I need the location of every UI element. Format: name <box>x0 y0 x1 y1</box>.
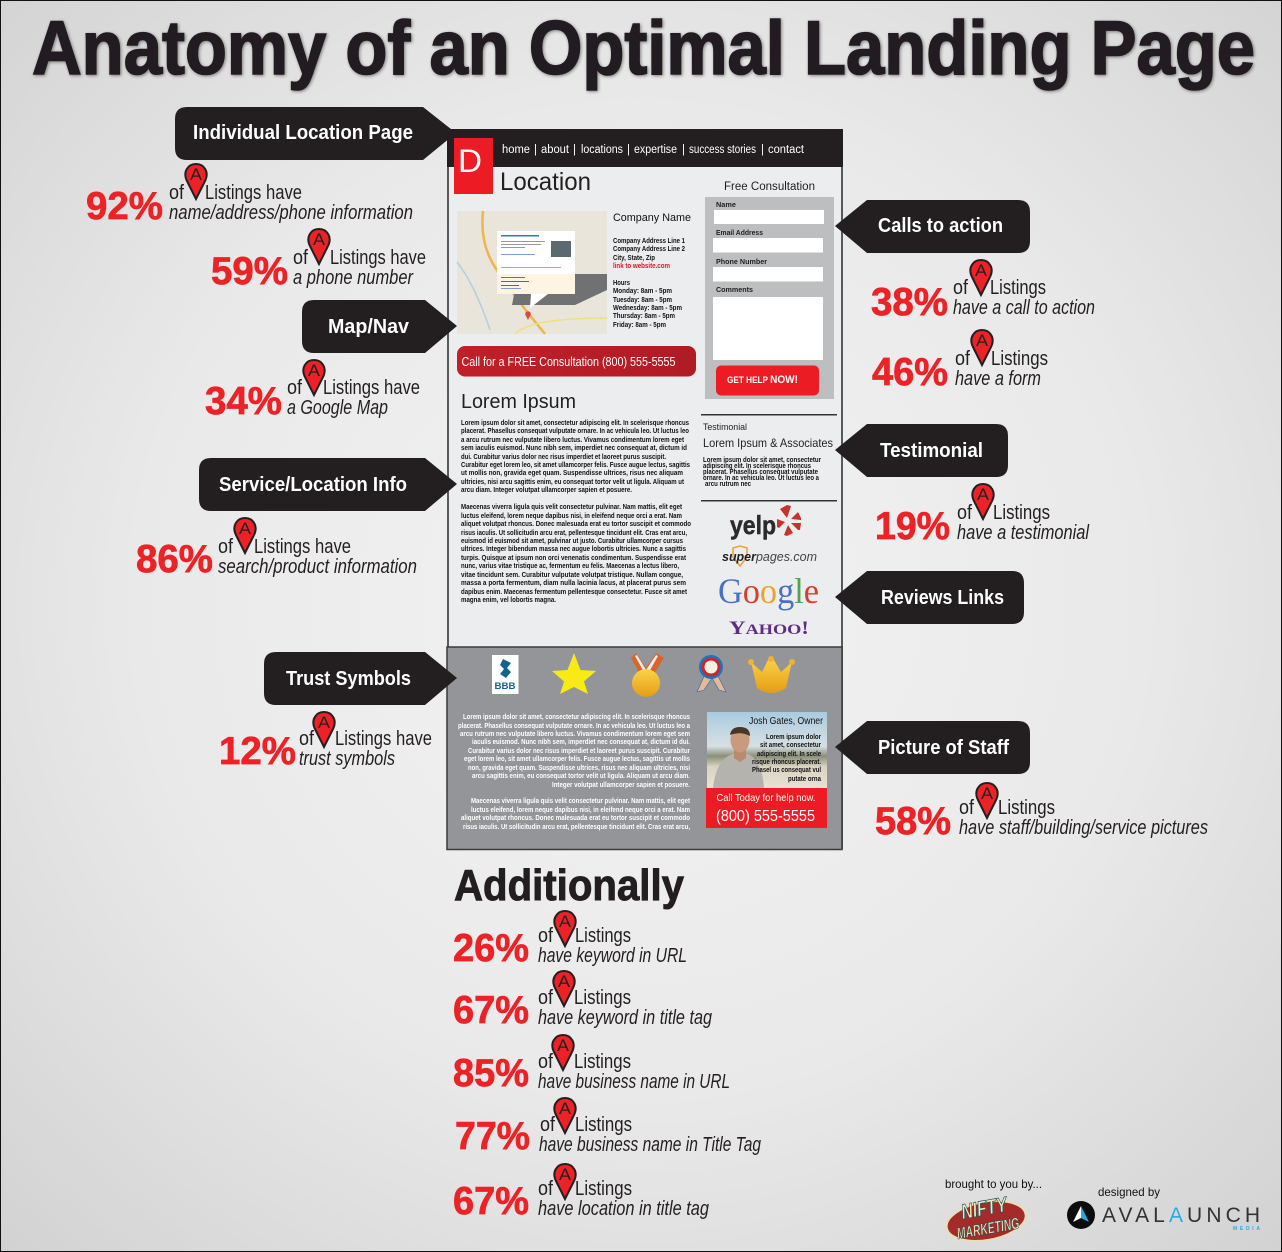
stat: 77% business name in title tag <box>455 1098 761 1158</box>
credit: nifty marketing: brought to you by... <box>945 1177 1042 1191</box>
stat: 67% location in title tag: have location in title tag <box>538 1198 709 1220</box>
company details: City, State, Zip <box>613 255 655 262</box>
stat: 67% keyword in title tag <box>453 971 712 1032</box>
body copy: arcu diam. Integer volutpat ullamcorper sapien et posuere. <box>461 487 632 494</box>
company details: Tuesday: 8am - 5pm <box>613 297 672 304</box>
navigation: | <box>682 144 685 156</box>
stat: 26% keyword in URL: of <box>538 925 553 947</box>
navigation: | <box>627 144 630 156</box>
stat: 12% trust symbols: trust symbols <box>299 748 395 770</box>
icon: BBB <box>492 655 518 694</box>
stat: 19% testimonial: of <box>957 502 972 524</box>
stat: 46% form: of <box>955 348 970 370</box>
testimonial block: adipiscing elit. In scelerisque rhoncus <box>703 463 811 470</box>
body copy: magna enim, vel lobortis magna. <box>461 597 556 604</box>
footer copy: aliquet volutpat rhoncus. Donec malesuada erat eu tortor suscipit et commodo <box>461 815 690 822</box>
logo: avalaunch: MEDIA <box>1233 1226 1260 1232</box>
stat: 38% call to action <box>871 260 1095 324</box>
staff photo card: Lorem ipsum dolor <box>766 734 821 741</box>
header bar <box>447 129 843 167</box>
stat: 85% business name in URL: have business name in URL <box>538 1071 730 1093</box>
stat: 38% call to action: have a call to action <box>953 297 1095 319</box>
stat: 86% search/product: search/product information <box>218 556 417 578</box>
stat: 92% name/address/phone: of <box>169 182 184 204</box>
company details: link to website.com <box>613 263 670 270</box>
logo: nifty marketing: MARKETING <box>956 1215 1021 1243</box>
heading: additionally: Additionally <box>454 861 684 910</box>
navigation: | <box>573 144 576 156</box>
stat: 34% google map: Listings have <box>323 377 420 399</box>
icon: rosette <box>697 655 726 692</box>
navigation <box>502 144 805 156</box>
callout: picture of staff <box>835 721 1030 774</box>
company details <box>613 212 691 329</box>
stat: 58% staff pictures: Listings <box>998 797 1055 819</box>
stat: 19% testimonial <box>875 484 1089 548</box>
body copy: massa a porta fermentum, diam nulla lacinia lacus, at placerat purus sem <box>461 580 686 587</box>
stat: 38% call to action: Listings <box>990 277 1046 299</box>
stat: 85% business name in URL <box>453 1035 730 1095</box>
stat: 86% search/product <box>136 518 417 581</box>
stat: 92% name/address/phone: name/address/phone information <box>169 202 413 224</box>
contact form: Name <box>716 200 736 209</box>
callout: calls to action <box>835 200 1030 253</box>
staff photo card: putate orna <box>788 776 821 783</box>
callout: testimonial <box>835 424 1008 477</box>
staff photo card: sit amet, consectetur <box>760 742 821 749</box>
stat: 38% call to action: of <box>953 277 968 299</box>
stat: 67% keyword in title tag: have keyword in title tag <box>538 1007 712 1029</box>
stat: 86% search/product: 86% <box>136 538 213 581</box>
stat: 12% trust symbols: 12% <box>219 730 296 773</box>
navigation: expertise <box>634 144 677 156</box>
body copy: turpis. Quisque at ipsum non orci venenatis condimentum. Suspendisse erat <box>461 555 687 562</box>
body copy: aliquet volutpat rhoncus. Donec malesuada erat eu tortor suscipit et commodo <box>461 521 691 528</box>
call button <box>457 346 696 376</box>
stat: 26% keyword in URL <box>453 911 687 970</box>
stat: 59% phone number: Listings have <box>330 247 426 269</box>
stat: 46% form: 46% <box>872 351 948 394</box>
stat: 86% search/product: of <box>218 536 233 558</box>
footer copy: Maecenas viverra ligula quis velit consectetur pulvinar. Nam mattis, elit eget <box>471 798 691 805</box>
body copy <box>461 420 691 604</box>
stat: 58% staff pictures: have staff/building/service pictures <box>959 817 1208 839</box>
testimonial block <box>701 414 837 502</box>
contact form: Comments <box>716 285 753 294</box>
logo: google: Google <box>718 571 819 611</box>
body copy: Maecenas viverra ligula quis velit consectetur pulvinar. Nam mattis, elit eget <box>461 504 683 511</box>
staff photo card: Josh Gates, Owner <box>749 716 824 727</box>
logo <box>454 138 493 194</box>
staff photo card: adipiscing elit. In scele <box>757 751 821 758</box>
navigation: about <box>541 144 570 156</box>
stat: 26% keyword in URL: A <box>559 912 572 931</box>
stat: 46% form: Listings <box>991 348 1048 370</box>
logo: superpages: superpages.com <box>722 549 817 564</box>
review logos <box>718 505 819 639</box>
footer copy: risus iaculis. Ut sollicitudin arcu erat, pellentesque tincidunt elit. Cras erat arcu, <box>463 824 690 831</box>
stat: 46% form: have a form <box>955 368 1041 390</box>
navigation: | <box>761 144 764 156</box>
testimonial block: Testimonial <box>703 422 747 432</box>
footer copy: eget lorem leo, sit amet ullamcorper felis. Fusce augue lectus, sagittis ut mollis <box>464 756 690 763</box>
footer copy: arcu sagittis enim, eu consequat tortor velit ut ligula. Aliquam ut arcu diam. <box>472 773 690 780</box>
footer copy: Lorem ipsum dolor sit amet, consectetur adipiscing elit. In scelerisque rhoncus <box>463 714 690 721</box>
submit button <box>716 366 819 396</box>
staff photo card: (800) 555-5555 <box>716 808 815 825</box>
callout: map/nav <box>302 300 457 353</box>
stat: 85% business name in URL: Listings <box>574 1051 631 1073</box>
stat: 12% trust symbols <box>219 712 432 773</box>
callout: picture of staff: Picture of Staff <box>878 737 1009 759</box>
stat: 58% staff pictures <box>875 783 1208 843</box>
icon: star <box>552 653 596 694</box>
stat: 67% location in title tag: Listings <box>575 1178 632 1200</box>
footer copy <box>458 714 691 831</box>
body copy: Curabitur eget lorem leo, sit amet ullamcorper felis. Fusce augue lectus, sagittis <box>461 462 690 469</box>
logo: avalaunch <box>1067 1201 1260 1232</box>
body copy: dui. Curabitur varius dolor nec risus imperdiet et laoreet purus suscipit. <box>461 454 666 461</box>
company details: Friday: 8am - 5pm <box>613 322 666 329</box>
callout: service/location info <box>199 458 457 511</box>
stat: 67% location in title tag <box>453 1164 709 1223</box>
company details: Company Address Line 1 <box>613 238 685 245</box>
stat: 59% phone number: a phone number <box>293 267 414 289</box>
footer copy: luctus eleifend, lorem neque dapibus nisi, in eleifend neque orci a erat. Nam <box>471 807 690 814</box>
stat: 34% google map <box>205 360 420 423</box>
logo: nifty marketing: NIFTY <box>959 1193 1010 1224</box>
navigation: home <box>502 144 530 156</box>
heading: free consultation: Free Consultation <box>724 181 815 193</box>
stat: 92% name/address/phone: 92% <box>86 185 163 228</box>
stat: 46% form: A <box>976 331 989 350</box>
stat: 58% staff pictures: 58% <box>875 800 951 843</box>
callout: service/location info: Service/Location Info <box>219 474 407 496</box>
company details: Thursday: 8am - 5pm <box>613 313 675 320</box>
stat: 67% location in title tag: 67% <box>453 1180 529 1223</box>
stat: 85% business name in URL: of <box>538 1051 553 1073</box>
callout: map/nav: Map/Nav <box>328 316 410 338</box>
stat: 67% location in title tag: of <box>538 1178 553 1200</box>
stat: 58% staff pictures: of <box>959 797 974 819</box>
stat: 58% staff pictures: A <box>981 784 994 803</box>
body copy: sem iaculis euismod. Nunc nibh sem, imperdiet nec consequat at, dictum id <box>461 445 687 452</box>
company details: Wednesday: 8am - 5pm <box>613 305 682 312</box>
stat: 46% form <box>872 330 1048 394</box>
navigation: locations <box>581 144 623 156</box>
logo: D <box>458 143 482 179</box>
footer copy: Curabitur varius dolor nec risus imperdiet et laoreet purus suscipit. Curabitur <box>468 748 690 755</box>
logo: yelp: yelp <box>730 510 776 540</box>
contact form <box>705 197 834 399</box>
staff photo card <box>706 712 827 828</box>
company details: Monday: 8am - 5pm <box>613 288 672 295</box>
contact form: Email Address <box>716 228 763 237</box>
stat: 26% keyword in URL: 26% <box>453 927 529 970</box>
stat: 77% business name in title tag: 77% <box>455 1115 530 1158</box>
stat: 67% keyword in title tag: A <box>558 972 571 991</box>
logo: nifty marketing <box>943 1190 1029 1247</box>
body copy: placerat. Phasellus consequat vulputate ornare. In ac vehicula leo. Ut luctus leo <box>461 428 689 435</box>
stat: 67% keyword in title tag: of <box>538 987 553 1009</box>
stat: 92% name/address/phone: A <box>190 165 203 184</box>
heading: location: Location <box>500 168 591 196</box>
stat: 86% search/product: A <box>239 519 252 538</box>
icon: BBB: BBB <box>494 681 516 691</box>
footer copy: non, gravida eget quam. Suspendisse ultrices, risus nec aliquam ultricies, nisi <box>468 765 690 772</box>
credit: nifty marketing <box>943 1177 1042 1247</box>
stat: 12% trust symbols: Listings have <box>335 728 432 750</box>
icon: crown <box>748 656 795 693</box>
footer copy: Integer volutpat ullamcorper sapien et posuere. <box>552 782 690 789</box>
stat: 67% keyword in title tag: Listings <box>574 987 631 1009</box>
stat: 38% call to action: 38% <box>871 281 948 324</box>
body copy: ut mollis non, gravida eget quam. Suspendisse ultrices, risus nec aliquam <box>461 470 683 477</box>
company details: Company Address Line 2 <box>613 246 685 253</box>
heading: lorem ipsum: Lorem Ipsum <box>461 391 576 413</box>
panel: trust footer <box>447 647 842 850</box>
stat: 86% search/product: Listings have <box>254 536 351 558</box>
stat: 59% phone number: 59% <box>211 250 288 293</box>
map <box>457 211 607 334</box>
body copy: ultrices. Integer bibendum massa nec augue lobortis ultricies. Nunc a sagittis <box>461 546 686 553</box>
testimonial block: Lorem ipsum dolor sit amet, consectetur <box>703 457 821 464</box>
testimonial block: arcu rutrum nec <box>705 481 751 488</box>
stat: 34% google map: of <box>287 377 302 399</box>
staff photo card: risque rhoncus placerat. <box>752 759 821 766</box>
callout: individual location page: Individual Location Page <box>193 122 413 144</box>
body copy: dapibus enim. Maecenas fermentum pellentesque consectetur. Fusce sit amet <box>461 589 688 596</box>
staff photo card: Phasel us consequat vul <box>752 767 821 774</box>
logo: avalaunch: AVALAUNCH <box>1102 1204 1260 1227</box>
body copy: Lorem ipsum dolor sit amet, consectetur adipiscing elit. In scelerisque rhoncus <box>461 420 689 427</box>
staff photo card: Call Today for help now. <box>716 792 816 804</box>
stat: 67% location in title tag: A <box>559 1165 572 1184</box>
body copy: euismod id euismod sit amet, pulvinar ut justo. Curabitur ullamcorper cursus <box>461 538 683 545</box>
company details: Hours <box>613 280 630 287</box>
stat: 34% google map: 34% <box>205 380 282 423</box>
body copy: a arcu rutrum nec vulputate libero luctus. Vivamus condimentum lorem eget <box>461 437 685 444</box>
icon: medal <box>631 653 664 697</box>
credit: avalaunch <box>1067 1185 1260 1232</box>
body copy: luctus eleifend, lorem neque dapibus nisi, in eleifend neque orci a erat. Nam <box>461 513 682 520</box>
stat: 19% testimonial: have a testimonial <box>957 522 1089 544</box>
stat: 85% business name in URL: 85% <box>453 1052 529 1095</box>
body copy: vitae tincidunt sem. Curabitur vulputate volutpat tristique. Nullam congue, <box>461 572 683 579</box>
callout: trust symbols: Trust Symbols <box>286 668 411 690</box>
stat: 34% google map: A <box>308 361 321 380</box>
credit: avalaunch: designed by <box>1098 1185 1160 1199</box>
call button: Call for a FREE Consultation (800) 555-5555 <box>462 355 676 369</box>
stat: 59% phone number: of <box>293 247 308 269</box>
stat: 77% business name in title tag: Listings <box>575 1114 632 1136</box>
stat: 38% call to action: A <box>975 261 988 280</box>
stat: 26% keyword in URL: Listings <box>575 925 631 947</box>
callout: trust symbols <box>264 652 457 705</box>
panel: landing page mockup <box>447 129 843 850</box>
callout: individual location page <box>175 107 456 160</box>
stat: 59% phone number <box>211 229 426 293</box>
testimonial block: placerat. Phasellus consequat vulputate <box>703 469 818 476</box>
stat: 92% name/address/phone <box>86 164 413 228</box>
stat: 85% business name in URL: A <box>557 1036 570 1055</box>
stat: 12% trust symbols: A <box>318 713 331 732</box>
contact form: Phone Number <box>716 257 767 266</box>
callout: reviews links <box>835 571 1024 624</box>
body copy: nunc, varius vitae tristique ac, fermentum eu felis. Maecenas a lectus libero, <box>461 563 679 570</box>
navigation: contact <box>768 144 805 156</box>
logo: yahoo: YAHOO ! <box>729 618 809 639</box>
stat: 19% testimonial: Listings <box>993 502 1050 524</box>
stat: 34% google map: a Google Map <box>287 397 388 419</box>
body copy: risus iaculis. Ut sollicitudin arcu erat, pellentesque tincidunt elit. Cras erat arcu, <box>461 530 687 537</box>
callout: reviews links: Reviews Links <box>881 587 1004 609</box>
stat: 59% phone number: A <box>313 230 326 249</box>
body copy: ultricies, nisi arcu sagittis enim, eu consequat tortor velit ut ligula. Aliquam ut <box>461 479 685 486</box>
footer copy: placerat. Phasellus consequat vulputate ornare. In ac vehicula leo. Ut luctus leo a <box>458 723 690 730</box>
testimonial block: ornare. In ac vehicula leo. Ut luctus leo a <box>703 475 819 482</box>
stat: 77% business name in title tag: of <box>540 1114 555 1136</box>
stat: 77% business name in title tag: A <box>559 1099 572 1118</box>
stat: 26% keyword in URL: have keyword in URL <box>538 945 687 967</box>
stat: 19% testimonial: A <box>977 485 990 504</box>
stat: 67% keyword in title tag: 67% <box>453 989 529 1032</box>
stat: 92% name/address/phone: Listings have <box>205 182 302 204</box>
navigation: success stories <box>689 144 756 156</box>
submit button: GET HELP NOW! <box>727 374 798 386</box>
stat: 12% trust symbols: of <box>299 728 314 750</box>
callout: calls to action: Calls to action <box>878 215 1003 237</box>
company details: Company Name <box>613 212 691 224</box>
stat: 77% business name in title tag: have business name in Title Tag <box>539 1134 761 1156</box>
testimonial block: Lorem Ipsum & Associates <box>703 436 833 450</box>
footer copy: arcu rutrum nec vulputate libero luctus. Vivamus condimentum lorem eget sem <box>460 731 690 738</box>
stat: 19% testimonial: 19% <box>875 505 950 548</box>
footer copy: iaculis euismod. Nunc nibh sem, imperdiet nec consequat at, dictum id dui. <box>472 739 690 746</box>
navigation: | <box>534 144 537 156</box>
callout: testimonial: Testimonial <box>880 440 983 462</box>
